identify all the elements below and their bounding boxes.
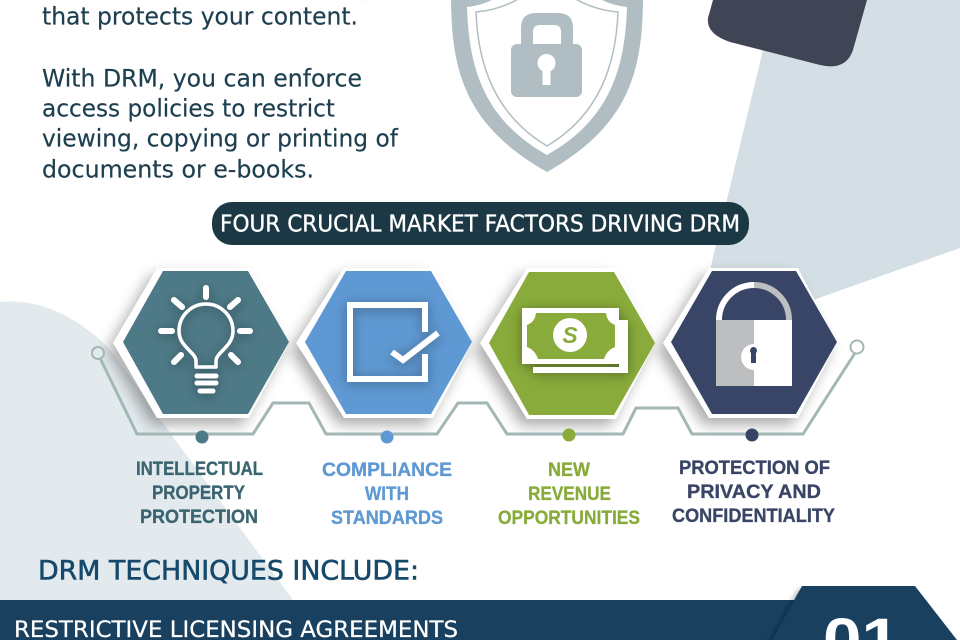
label: STANDARDS (331, 508, 443, 529)
label: REVENUE (528, 484, 611, 505)
intro text: that protects your content. (42, 2, 358, 30)
heading pill: FOUR CRUCIAL MARKET FACTORS DRIVING DRM (220, 212, 740, 238)
label: COMPLIANCE (322, 460, 452, 481)
label: INTELLECTUAL (136, 459, 263, 480)
background shape: lower left (0, 301, 293, 600)
dark rounded tile (708, 0, 867, 66)
factor 4: privacy (663, 268, 837, 527)
heading pill (212, 202, 749, 245)
label (672, 458, 835, 527)
label: NEW (548, 460, 590, 481)
intro text: With DRM, you can enforce (42, 64, 362, 92)
intro text (42, 0, 399, 184)
number tab (766, 586, 957, 640)
icon: banknotes: S (562, 322, 578, 348)
icon: banknotes (522, 308, 628, 373)
connector line (92, 340, 864, 434)
dot (380, 430, 394, 444)
label: CONFIDENTIALITY (672, 506, 835, 527)
label (498, 460, 640, 529)
label: WITH (365, 484, 409, 505)
intro text: access policies to restrict (42, 94, 335, 122)
intro text: viewing, copying or printing of (42, 124, 399, 152)
icon: shield with padlock (451, 0, 643, 172)
factor 3: new revenue (480, 268, 655, 529)
label: PROTECTION OF (679, 458, 830, 479)
hexagon shadows (107, 275, 831, 426)
icon: half-shaded padlock (716, 285, 792, 386)
dot (562, 428, 576, 442)
factor 2: compliance (296, 268, 472, 529)
dot (746, 428, 758, 442)
intro text: documents or e-books. (42, 156, 314, 184)
heading: techniques: DRM TECHNIQUES INCLUDE: (38, 556, 419, 586)
icon: light bulb (161, 288, 250, 391)
label: PROTECTION (140, 507, 258, 528)
background shape: right panel (700, 0, 960, 340)
label: OPPORTUNITIES (498, 508, 640, 529)
factor 1: intellectual property (113, 268, 289, 528)
label: PRIVACY AND (687, 482, 821, 503)
label (322, 460, 452, 529)
technique bar 01 (0, 586, 957, 640)
dot (196, 430, 208, 444)
icon: checkbox (350, 305, 438, 379)
label (136, 459, 263, 528)
label: PROPERTY (152, 483, 245, 504)
